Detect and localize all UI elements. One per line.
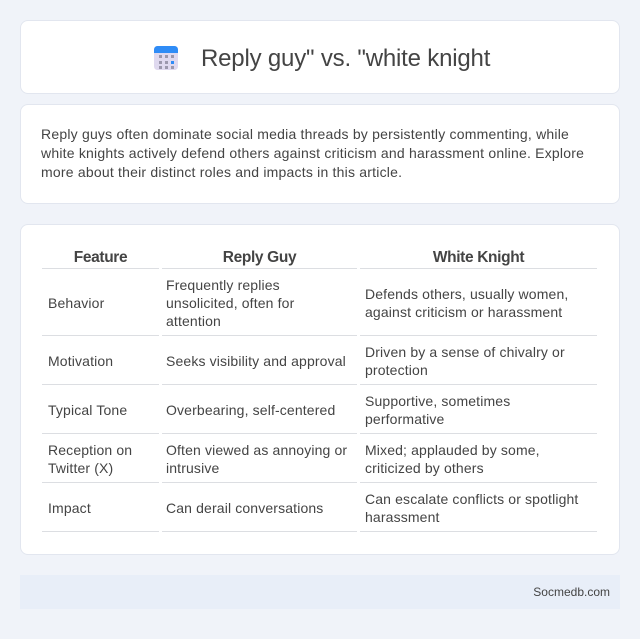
footer source: Socmedb.com [533,585,610,599]
intro paragraph: white knights actively defend others against criticism and harassment online. Explore [41,145,584,161]
cell [365,286,568,320]
cell: intrusive [166,460,219,476]
row: Reception: Reception on [48,442,132,458]
cell: protection [365,362,428,378]
row: Impact: Impact [48,500,91,516]
cell: harassment [365,509,440,525]
header: Reply Guy: Reply Guy [223,249,296,266]
cell: Seeks visibility and approval [166,353,346,369]
cell [365,491,578,525]
cell [365,393,510,427]
title: Reply guy" vs. "white knight [201,45,490,72]
header: White Knight: White Knight [433,249,524,266]
cell [365,344,565,378]
intro text card [20,104,620,204]
cell [166,277,294,329]
intro paragraph: Reply guys often dominate social media threads by persistently commenting, while [41,126,569,142]
cell: unsolicited, often for [166,295,294,311]
cell: against criticism or harassment [365,304,562,320]
cell: performative [365,411,444,427]
cell: Frequently replies [166,277,280,293]
cell: Can derail conversations [166,500,323,516]
row: Reception [48,442,132,476]
cell: Supportive, sometimes [365,393,510,409]
cell: attention [166,313,221,329]
cell [166,442,347,476]
title card [20,20,620,94]
cell: Defends others, usually women, [365,286,568,302]
cell: criticized by others [365,460,484,476]
row: Behavior: Behavior [48,295,104,311]
footer bar [20,575,620,609]
cell: Can escalate conflicts or spotlight [365,491,578,507]
row: Reception: Twitter (X) [48,460,113,476]
header: Feature: Feature [74,249,127,266]
comparison table card [20,224,620,555]
row: Typical Tone: Typical Tone [48,402,127,418]
row: Motivation: Motivation [48,353,113,369]
cell: Overbearing, self-centered [166,402,335,418]
cell: Driven by a sense of chivalry or [365,344,565,360]
cell [365,442,540,476]
icon: calendar [154,46,178,70]
intro paragraph [41,126,584,180]
intro paragraph: more about their distinct roles and impacts in this article. [41,164,402,180]
cell: Mixed; applauded by some, [365,442,540,458]
cell: Often viewed as annoying or [166,442,347,458]
